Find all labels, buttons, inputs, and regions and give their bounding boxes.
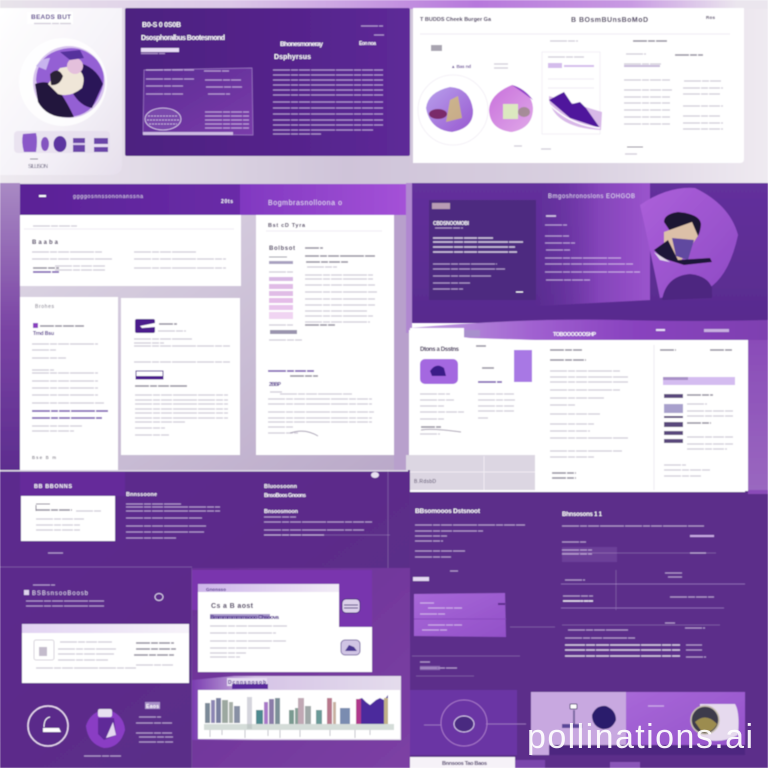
purple label [136,371,163,379]
text: top right list: Bluoosoonn [264,484,298,490]
sidebar title: BEADS BUT [31,14,71,21]
overview heading: B BOsmBUnsBoMoD [571,17,648,24]
orb: lilac food: ▲ Bas nd [451,64,471,69]
panel: white tall left card [20,297,118,470]
top background band [0,0,768,184]
icon row [14,131,110,153]
panel: purple card with white sheet [192,570,372,672]
orb: pink food [489,64,533,132]
lower left light block: B.RdsbD [414,479,436,485]
intro right heading: Dsphyrsus [274,54,311,61]
header: white panels band: Bogmbrasnolloona o [268,200,342,207]
glass card diagram [143,68,253,135]
small chip [431,45,442,51]
dark ring panel [410,690,526,755]
panel: purple card with white sheet: Cs a B aost [211,603,254,610]
overview heading: Ros [706,15,715,20]
panel: white right tall card: Bst cD Tyra [268,223,306,229]
icon: top corner chip [371,472,379,478]
section heading: lower left: BSBsnsooBoosb [32,591,89,597]
icon: badge [22,133,37,152]
lilac tile [514,350,532,382]
text: top purple paragraph: Bnnssoone [126,492,157,498]
ribbon band [410,320,768,345]
bars [205,695,388,729]
reflection base [204,724,394,738]
icon: badge on purple [342,599,360,613]
header: white panels band: 20ts [221,199,233,205]
section heading: lower left [24,585,163,606]
bottom left background [0,470,410,768]
right side purple [748,340,768,492]
ledger rows [664,394,683,443]
panel: white top left card [20,215,241,286]
overview text column [514,41,723,154]
chart panel: skyline bars [192,676,401,740]
purple text area: Bmgoshronoslons EOHGOB [548,194,635,200]
small purple glyph [33,323,38,328]
text: right data table [561,512,745,657]
panel: small white note: BB BBONNS [34,484,72,490]
panel: white illustrated overview [413,8,744,163]
background: right column [406,183,768,333]
intro heading: Dsosphoralbus Bootesmond [141,35,225,42]
header: white panels band [20,184,408,215]
purple text area [545,194,640,280]
text: right data table: Bhnsosons 1 1 [562,512,603,518]
panel: white middle card [121,298,240,455]
orb: lilac food [418,64,488,145]
dark shadow shape [662,274,712,300]
panel: dark intro [125,8,410,156]
panel: white tall left card: Bse B m [32,455,56,460]
mountain chart card [542,41,602,134]
icon: drop [41,137,49,151]
sidebar caption [28,159,48,170]
text: top right list [264,472,390,535]
ring badge [454,716,474,732]
stat text: Eaos [146,704,159,710]
mini document icon [34,640,54,660]
lower left light block [406,455,536,493]
gallery: porthole image [691,704,739,741]
gallery: lamp glyph [562,704,582,728]
lilac image tile [420,359,458,384]
panel: purple card with white sheet: Gnonsso [206,587,226,592]
lilac note card [414,593,555,637]
portrait [654,212,712,265]
panel: white left lower card [409,330,535,455]
bottom right background [410,491,768,768]
circular portrait image [19,38,107,126]
panel: small white note [21,484,115,553]
gallery: dark stone [592,706,616,729]
chart heading [227,678,268,689]
intro heading: B0-S 0 0S0B [142,22,181,29]
pink key column [269,257,302,340]
text: top purple paragraph [126,492,220,538]
intro body text [273,70,383,134]
lilac highlight [663,377,735,385]
panel: white top left card: Baaba [32,240,59,246]
panel: white text sheet [535,340,748,492]
column divider [653,345,655,492]
icon: stacked card [73,138,85,152]
intro right heading: Bhonesmoneray [280,41,323,48]
dark text panel: CBDSNOOMOBI [433,221,470,227]
sidebar caption: SILLISON [28,164,48,170]
overview heading [420,15,730,34]
lilac gallery panel [531,692,745,755]
stat text [84,702,173,756]
icon: purple badge [135,319,155,333]
header: white panels band: ggggosnnssononanssna [73,194,144,200]
sidebar title [27,12,73,24]
panel: profile sidebar [0,8,122,175]
text: lower left legend [412,656,520,676]
lilac blob with portrait [640,188,738,300]
ring icon: shoes [28,706,68,746]
panel: white right tall card: 2BBP [269,382,282,388]
blob icon [86,709,125,748]
intro right heading: Eon noa [359,41,376,47]
text: purple left block: BBsomooos Dstsnoot [415,508,481,515]
panel: white left lower card: Dtons a Dsstns [420,347,460,353]
chart heading: Dcnnsnosob [228,680,266,686]
panel: wide white card [22,624,189,683]
bottom caption tab: Bnnsoos Tao Baos [442,761,487,767]
panel: purple card with white sheet: Bmmmmmmmsooo Chsoova [210,615,280,621]
overview heading: T BUDDS Cheek Burger Ga [420,17,492,23]
strip under sheets [410,490,768,494]
text: purple left block [413,508,525,581]
background: middle band left [0,183,410,473]
ribbon band: TOBOOOOOOSHP [553,332,596,338]
panel: white tall left card: Brohes [35,304,54,310]
dark text panel [429,200,536,300]
panel: white right tall card: Bolbsot [269,246,295,252]
icon: small circle [155,594,163,600]
bottom caption tab [410,757,640,768]
intro heading [141,22,225,54]
watermark: pollinations.ai [527,718,753,756]
panel: white right tall card [256,215,394,455]
text: top right list: BnsoBoos Gnoons [264,493,306,499]
icon: badge on white [341,640,360,655]
icon: folder card [94,138,108,152]
intro right heading [274,26,384,61]
icon: oval [54,136,66,152]
panel: white tall left card: Trnd Bsu [33,331,54,337]
text: top right list: Bnsoosmoon [264,509,299,515]
